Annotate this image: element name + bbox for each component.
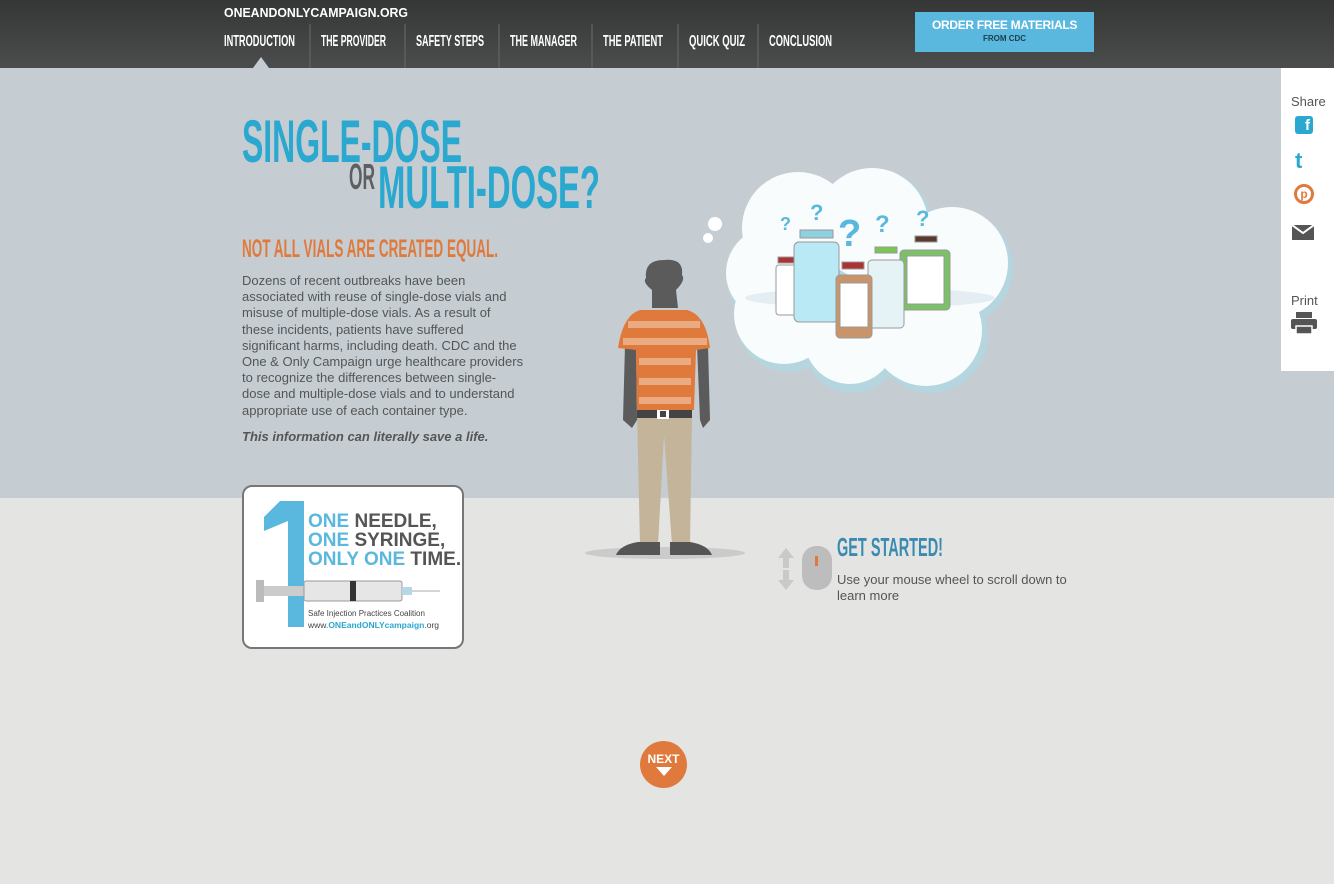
- share sidebar: [1281, 68, 1334, 371]
- belt: [637, 410, 692, 418]
- nav items: THE PATIENT: [603, 33, 663, 50]
- one and only logo card: ONE NEEDLE,: [308, 511, 437, 532]
- order button: ORDER FREE MATERIALS: [932, 18, 1077, 32]
- next button: NEXT: [647, 752, 680, 766]
- share sidebar: t: [1295, 148, 1302, 173]
- body text: significant harms, including death. CDC and the: [242, 338, 517, 353]
- nav bar: [0, 0, 1334, 68]
- body text: One & Only Campaign urge healthcare providers: [242, 354, 523, 369]
- illustration: person and thought cloud: ?: [780, 214, 791, 234]
- title: OR: [349, 156, 375, 197]
- body text: dose and multiple-dose vials and to understand: [242, 386, 514, 401]
- title: [242, 110, 600, 215]
- arms: [623, 345, 637, 428]
- syringe: [256, 580, 264, 602]
- head: [645, 260, 683, 308]
- body text: these incidents, patients have suffered: [242, 322, 464, 337]
- nav items: [224, 24, 832, 68]
- share sidebar: Print: [1291, 293, 1318, 308]
- nav items: QUICK QUIZ: [689, 33, 745, 50]
- body text: Dozens of recent outbreaks have been: [242, 273, 465, 288]
- nav items: THE MANAGER: [510, 33, 577, 50]
- top background: [0, 68, 1334, 498]
- one and only logo card: ONLY ONE TIME.: [308, 549, 461, 570]
- shoes: [616, 542, 660, 555]
- body text: misuse of multiple-dose vials. As a result of: [242, 305, 491, 320]
- one and only logo card: ONE SYRINGE,: [308, 530, 445, 551]
- cloud: [726, 168, 1008, 386]
- share sidebar: f: [1305, 117, 1310, 134]
- legs: [637, 412, 692, 545]
- illustration: person and thought cloud: [585, 168, 1013, 559]
- get started: Use your mouse wheel to scroll down to learn more: [837, 572, 1067, 603]
- order button: FROM CDC: [983, 34, 1026, 43]
- order button: [915, 12, 1094, 52]
- shirt: [618, 310, 710, 410]
- nav items: INTRODUCTION: [224, 33, 295, 50]
- next button: [640, 741, 687, 788]
- big 1: [264, 501, 304, 627]
- thought bubbles: [703, 233, 713, 243]
- one and only logo card: [242, 485, 464, 649]
- get started: [778, 532, 1067, 603]
- bottom background: [0, 498, 1334, 884]
- one and only logo card: www.ONEandONLYcampaign.org: [307, 620, 439, 630]
- icon: scroll mouse: [778, 546, 832, 590]
- nav items: SAFETY STEPS: [416, 33, 484, 50]
- illustration: person and thought cloud: ?: [875, 211, 890, 238]
- body text: associated with reuse of single-dose vials and: [242, 289, 506, 304]
- nav items: THE PROVIDER: [321, 33, 386, 50]
- cloud shadow: [727, 170, 1013, 393]
- body text: This information can literally save a life.: [242, 429, 488, 444]
- body text: to recognize the differences between single-: [242, 370, 496, 385]
- vials: [745, 288, 995, 308]
- share sidebar: Share: [1291, 94, 1326, 109]
- share sidebar: p: [1300, 187, 1308, 201]
- illustration: person and thought cloud: ?: [838, 213, 861, 255]
- illustration: person and thought cloud: ?: [916, 206, 929, 231]
- shadow: [585, 547, 745, 559]
- body text: appropriate use of each container type.: [242, 403, 467, 418]
- site name: ONEANDONLYCAMPAIGN.ORG: [224, 5, 408, 20]
- illustration: person and thought cloud: ?: [810, 200, 823, 225]
- nav items: CONCLUSION: [769, 33, 832, 50]
- body text: [242, 273, 523, 444]
- one and only logo card: Safe Injection Practices Coalition: [308, 609, 425, 618]
